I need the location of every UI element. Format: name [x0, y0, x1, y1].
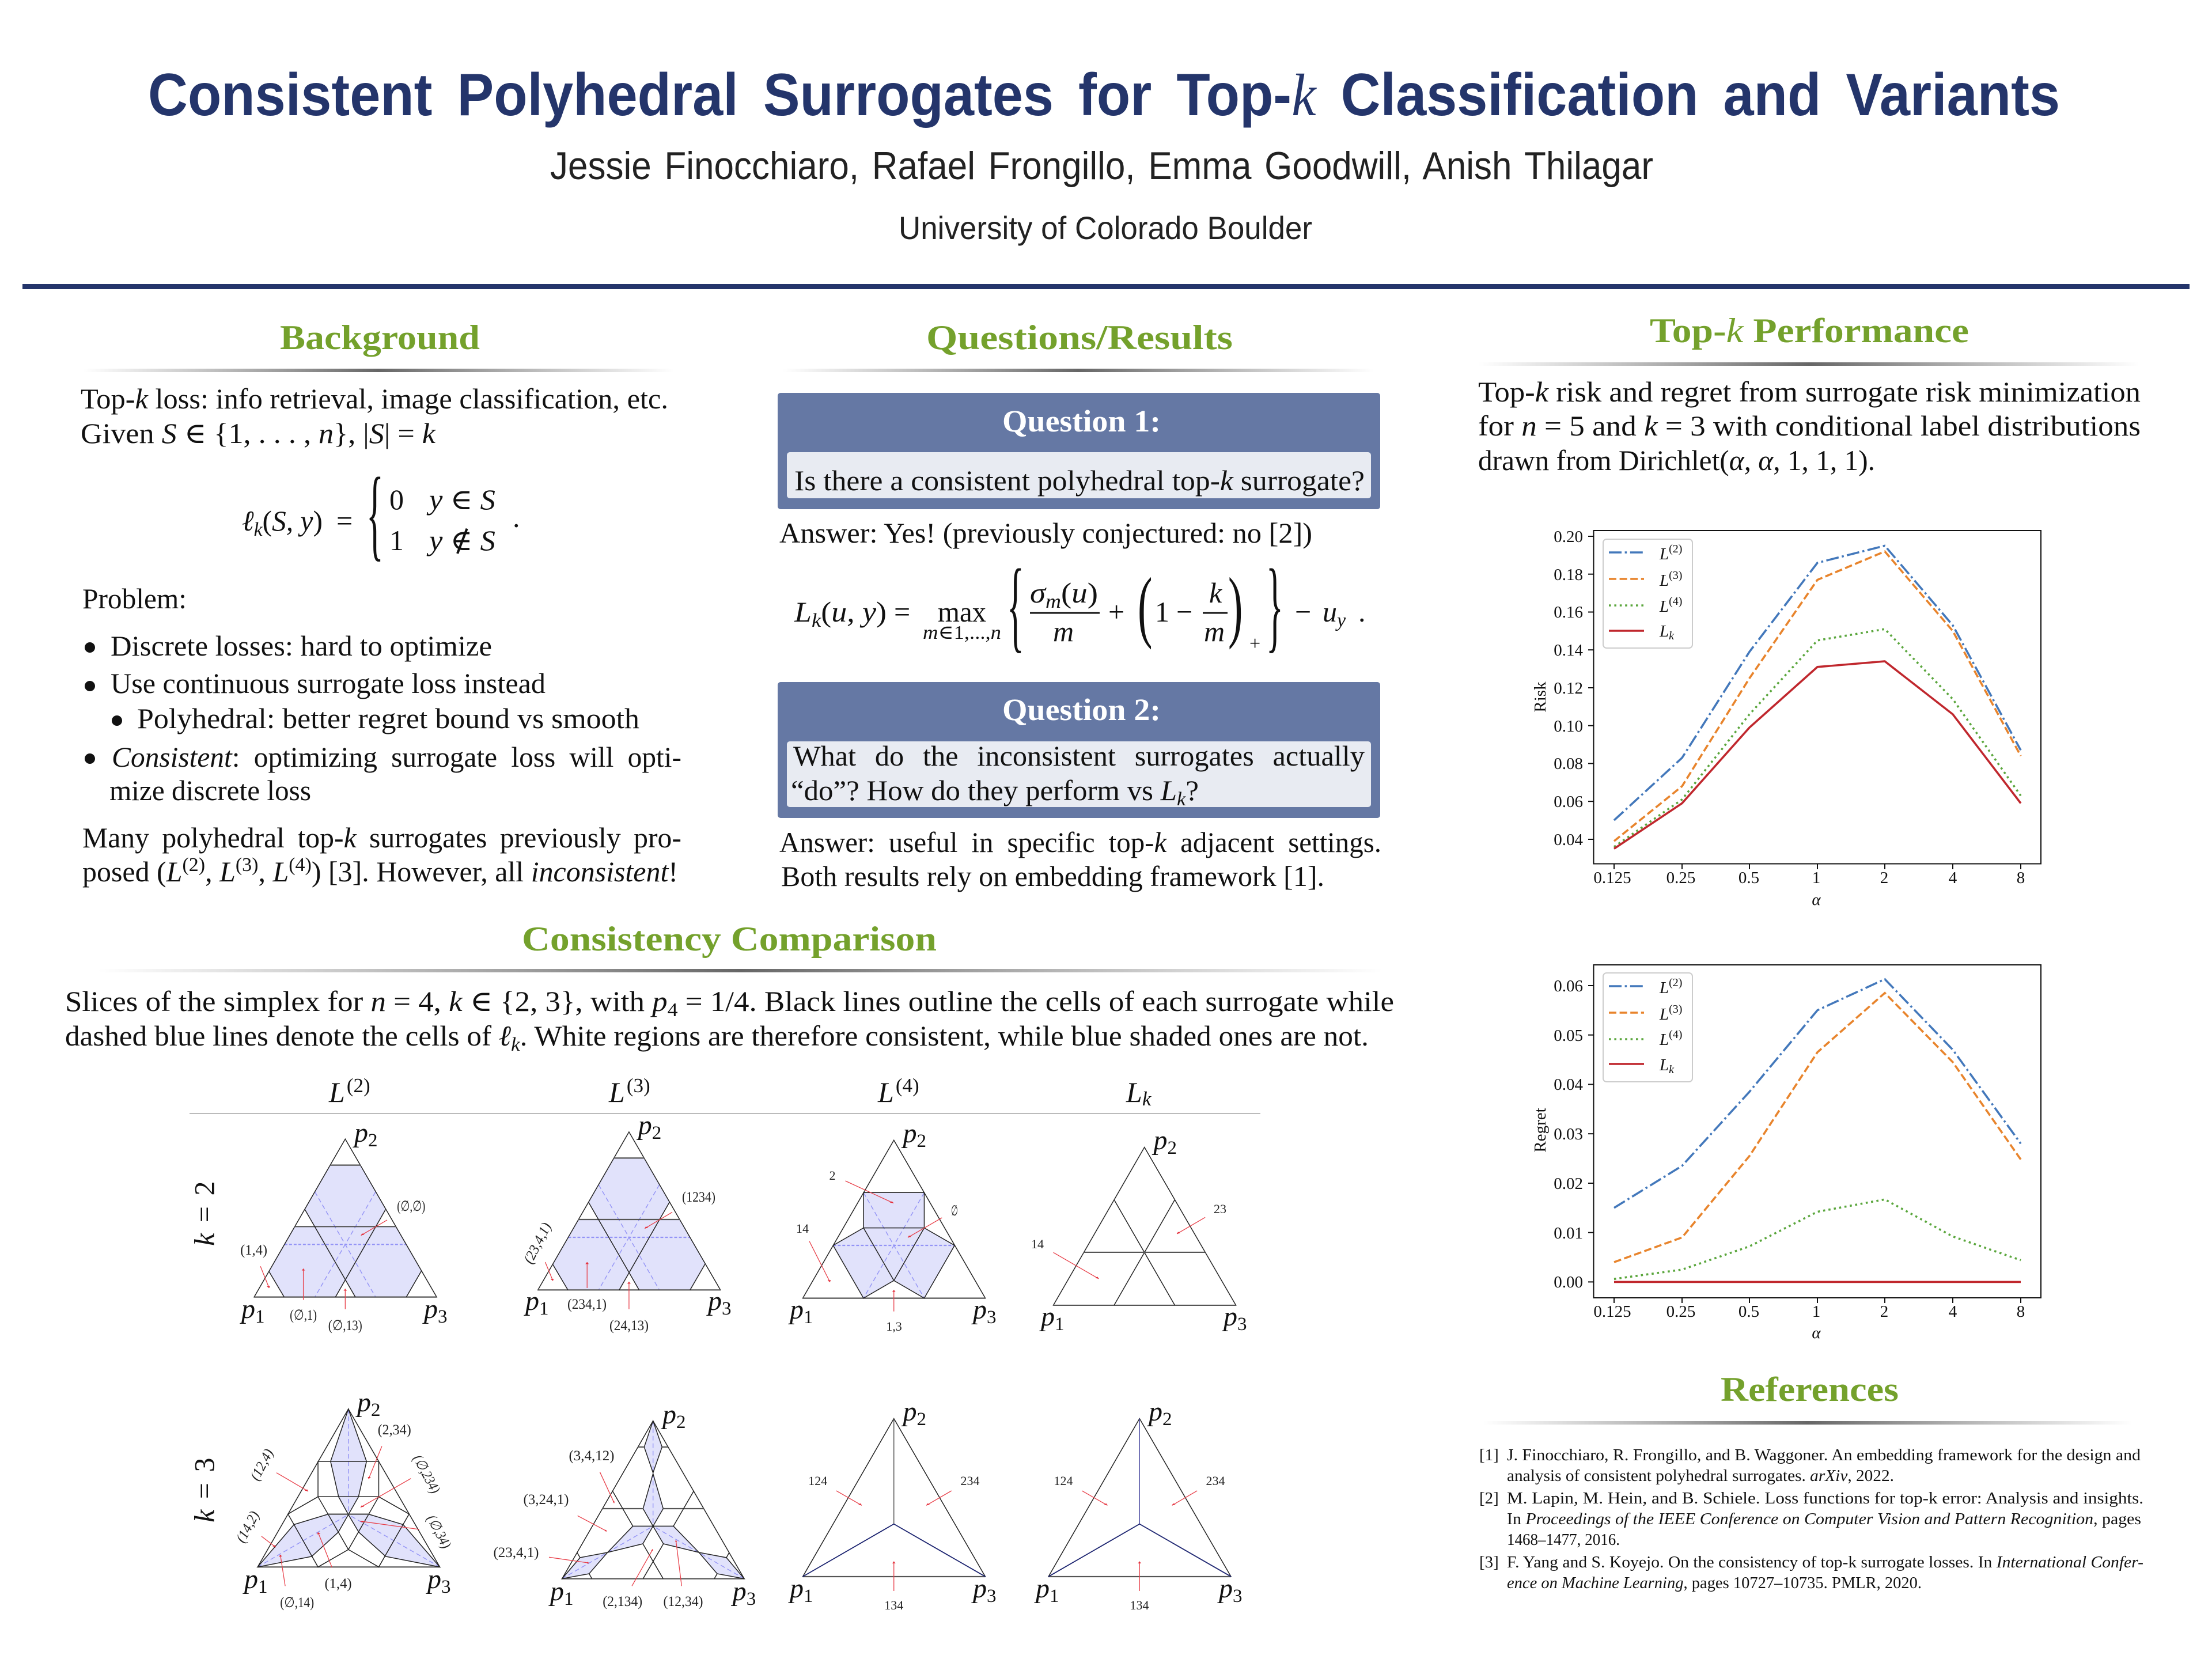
answer 1: Answer: Yes! (previously conjectured: no [2])	[779, 517, 1312, 549]
heading: top-k performance: Top-k Performance	[1650, 312, 1969, 350]
simplex: Lk k=2: 2	[1167, 1138, 1177, 1158]
line chart: regret: 0.04	[1554, 1075, 1583, 1094]
column headers	[328, 1074, 1152, 1110]
simplex: L2 k=2: 3	[438, 1306, 447, 1327]
simplex: L2 k=3: p	[427, 1564, 441, 1594]
line chart: regret: 8	[2017, 1302, 2025, 1321]
column headers: (3)	[627, 1074, 650, 1097]
simplex: L2 k=3: p	[244, 1564, 258, 1594]
line chart: risk: 0.20	[1554, 528, 1583, 546]
formula: surrogate Lk: .	[1358, 596, 1365, 628]
simplex: L3 k=3: (2,134)	[603, 1594, 642, 1609]
simplex: L3 k=2	[521, 1110, 732, 1334]
line chart: risk: α	[1812, 891, 1821, 909]
column headers: L	[609, 1076, 625, 1108]
text: description: k	[511, 1034, 521, 1055]
simplex: L4 k=3: p	[790, 1573, 804, 1604]
line chart: risk: 0.14	[1554, 641, 1583, 660]
formula: surrogate Lk: (	[1061, 577, 1071, 609]
formula: surrogate Lk: σ	[1030, 577, 1047, 609]
simplex: Lk k=3: 134	[1130, 1598, 1149, 1612]
question box 1: Is there a consistent polyhedral top- k surrogate?	[794, 464, 1365, 497]
reference list: M. Lapin, M. Hein, and B. Schiele. Loss functions for top-k error: Analysis and insights.	[1507, 1489, 2143, 1508]
formula: surrogate Lk: 1	[1155, 596, 1169, 628]
legend: L	[1660, 1056, 1669, 1074]
column headers: k	[1142, 1088, 1152, 1110]
legend: L	[1660, 979, 1669, 997]
simplex: L3 k=2: 2	[652, 1123, 661, 1143]
simplex: Lk k=2: p	[1153, 1125, 1167, 1156]
simplex: L3 k=2: (23,4,1)	[521, 1220, 555, 1266]
formula: discrete top-k loss: ℓ	[242, 505, 254, 537]
text: many surrogates: ) [3]. However, all	[312, 855, 531, 888]
answer 2: Both results rely on embedding framework [1].	[781, 860, 1324, 892]
bullet list	[85, 630, 681, 806]
text: many surrogates: ,	[258, 855, 272, 888]
simplex: L2 k=2: 1	[255, 1306, 265, 1327]
formula: surrogate Lk: m	[1046, 591, 1061, 612]
line chart: risk: 0.04	[1554, 831, 1583, 849]
formula: surrogate Lk: }	[1266, 548, 1283, 662]
legend: L	[1660, 1005, 1669, 1024]
line chart: risk: 8	[2017, 869, 2025, 887]
simplex: L3 k=2: 3	[722, 1298, 732, 1319]
line chart: risk: 0.18	[1554, 566, 1583, 584]
simplex: L4 k=3: 124	[808, 1474, 827, 1488]
simplex: L4 k=3: 2	[917, 1409, 926, 1430]
text: intro	[81, 382, 668, 449]
formula: surrogate Lk: u)	[1071, 577, 1097, 609]
legend: L	[1660, 545, 1669, 563]
simplex: L2 k=2: 2	[368, 1130, 378, 1151]
text: description: Slices of the simplex for n = 4, k ∈ {2, 3}, with p	[65, 985, 666, 1017]
text: performance description: Top-k risk and regret from surrogate risk minimization	[1478, 376, 2141, 408]
legend: L	[1660, 571, 1669, 590]
legend: (3)	[1669, 569, 1682, 582]
simplex: L4 k=2: 14	[796, 1221, 809, 1236]
heading: questions/results: Questions/Results	[926, 319, 1233, 357]
simplex: L4 k=3: 134	[884, 1598, 903, 1612]
text: problem: Problem:	[82, 582, 187, 615]
simplex: L4 k=3: p	[973, 1573, 987, 1604]
legend: (2)	[1669, 976, 1682, 989]
question box 2	[778, 682, 1380, 818]
line chart: risk: 0.5	[1738, 869, 1759, 887]
simplex: L4 k=3: p	[903, 1396, 917, 1427]
reference list: [2]	[1479, 1489, 1499, 1508]
formula: surrogate Lk: L	[794, 596, 812, 628]
formula: discrete top-k loss	[242, 456, 520, 570]
simplex: L2 k=3: (∅,34)	[423, 1513, 454, 1551]
panel: questions and results	[778, 319, 1381, 892]
reference list: [3]	[1479, 1553, 1499, 1571]
formula: discrete top-k loss: .	[513, 501, 520, 533]
bullet list: Discrete losses: hard to optimize	[111, 630, 492, 662]
formula: surrogate Lk: k	[1209, 577, 1222, 609]
simplex: L3 k=2: (234,1)	[567, 1297, 607, 1312]
simplex: Lk k=2: p	[1224, 1301, 1237, 1332]
simplex: Lk k=2: 3	[1237, 1314, 1247, 1335]
formula: discrete top-k loss: =	[336, 505, 353, 537]
formula: surrogate Lk: +	[1108, 596, 1124, 628]
reference list: In Proceedings of the IEEE Conference on Computer Vision and Pattern Recognition , pages	[1507, 1510, 2141, 1528]
formula: surrogate Lk: (	[1138, 562, 1152, 650]
simplex: L3 k=3: 3	[747, 1589, 756, 1609]
formula: discrete top-k loss: (	[263, 505, 272, 537]
simplex: L2 k=2: (∅,13)	[328, 1318, 362, 1334]
simplex: L2 k=3: (12,4)	[247, 1446, 276, 1483]
affiliation: University of Colorado Boulder	[899, 210, 1312, 246]
simplex: Lk k=2: 1	[1055, 1314, 1065, 1335]
simplex: L4 k=2: ∅	[951, 1203, 958, 1219]
heading: references: References	[1721, 1370, 1899, 1408]
legend: L	[1660, 597, 1669, 616]
formula: discrete top-k loss: y ∈ S	[426, 483, 495, 516]
simplex: L3 k=3: 2	[676, 1412, 685, 1433]
legend: k	[1669, 630, 1675, 642]
line chart: regret	[1531, 965, 2041, 1342]
line chart: regret: α	[1812, 1324, 1821, 1342]
line chart: regret: 0.05	[1554, 1027, 1583, 1045]
panel: references	[1479, 1370, 2143, 1592]
question box 1	[778, 393, 1380, 509]
simplex: L2 k=3: (∅,14)	[280, 1595, 314, 1611]
simplex: Lk k=3: p	[1219, 1573, 1233, 1604]
legend: (4)	[1669, 1028, 1682, 1041]
question box 1: Question 1:	[1002, 404, 1161, 438]
simplex: L4 k=2: p	[790, 1294, 804, 1325]
question box 2: What do the inconsistent surrogates actually	[793, 740, 1365, 772]
question box 2: k	[1177, 789, 1186, 810]
formula: surrogate Lk: (	[821, 596, 831, 628]
simplex: L2 k=3: (∅,234)	[410, 1452, 443, 1496]
simplex: L2 k=2: (∅,∅)	[397, 1199, 425, 1214]
column headers: (2)	[347, 1074, 370, 1097]
formula: surrogate Lk: m	[1053, 615, 1074, 647]
authors: Jessie Finocchiaro, Rafael Frongillo, Emma Goodwill, Anish Thilagar	[550, 144, 1653, 188]
simplex: L4 k=3: 1	[804, 1586, 813, 1607]
panel: consistency comparison	[65, 920, 1394, 1612]
legend: L	[1660, 622, 1669, 641]
legend: L	[1660, 1031, 1669, 1049]
simplex: L2 k=3	[233, 1387, 454, 1611]
simplex: L2 k=2: p	[354, 1118, 368, 1148]
line chart: regret: 0.25	[1666, 1302, 1695, 1321]
line chart: risk: 0.12	[1554, 679, 1583, 698]
simplex: L3 k=3	[493, 1399, 756, 1609]
simplex: L4 k=3: 3	[987, 1586, 997, 1607]
formula: surrogate Lk: y	[1335, 610, 1346, 631]
simplex: L4 k=2: p	[973, 1294, 987, 1325]
line chart: risk: 4	[1949, 869, 1957, 887]
formula: surrogate Lk: m	[1204, 615, 1225, 647]
simplex: L2 k=3: (1,4)	[325, 1576, 351, 1592]
legend: (2)	[1669, 543, 1682, 555]
simplex: L4 k=3: 234	[961, 1474, 979, 1488]
simplex: L3 k=3: (12,34)	[664, 1594, 703, 1609]
heading: consistency comparison: Consistency Comparison	[522, 920, 937, 958]
simplex: L3 k=3: (3,4,12)	[569, 1448, 614, 1464]
formula: surrogate Lk: u	[1323, 596, 1337, 628]
simplex: Lk k=3: 124	[1054, 1474, 1073, 1488]
formula: surrogate Lk: max	[938, 596, 986, 628]
simplex: L3 k=2: p	[525, 1286, 539, 1316]
title: Consistent Polyhedral Surrogates for Top-k Classification and Variants	[148, 62, 2060, 128]
column headers: L	[878, 1076, 894, 1108]
text: many surrogates: ,	[205, 855, 219, 888]
line chart: risk: 0.125	[1593, 869, 1631, 887]
legend	[1603, 539, 1692, 648]
line chart: risk: 0.06	[1554, 793, 1583, 811]
simplex: L3 k=2: p	[708, 1286, 722, 1316]
line chart: regret: 0.125	[1593, 1302, 1631, 1321]
bullet list: Consistent: optimizing surrogate loss will opti-	[112, 741, 681, 773]
text: description: = 1/4. Black lines outline the cells of each surrogate while	[678, 985, 1394, 1017]
simplex: L3 k=3: p	[662, 1399, 676, 1430]
line chart: regret: 0.00	[1554, 1273, 1583, 1291]
formula: surrogate Lk	[794, 548, 1365, 662]
column headers: L	[1126, 1076, 1142, 1108]
simplex: Lk k=3: 234	[1206, 1474, 1225, 1488]
text: many surrogates: (2)	[182, 854, 205, 876]
text: many surrogates: (3)	[236, 854, 258, 876]
simplex: L3 k=3: p	[733, 1576, 747, 1607]
simplex: L2 k=3: 3	[441, 1577, 450, 1597]
column headers: L	[329, 1076, 345, 1108]
panel: background	[81, 319, 681, 888]
panel: top-k performance	[1478, 312, 2141, 1342]
simplex: Lk k=2: p	[1041, 1301, 1055, 1332]
simplex: L4 k=2: 2	[917, 1131, 926, 1152]
line chart: risk: 0.16	[1554, 603, 1583, 622]
simplex: L2 k=2: p	[424, 1294, 438, 1324]
formula: surrogate Lk: =	[894, 596, 910, 628]
simplex: L2 k=3: (14,2)	[233, 1509, 263, 1546]
formula: discrete top-k loss: 1	[389, 524, 404, 556]
answer 2	[779, 826, 1381, 892]
bullet list: Use continuous surrogate loss instead	[111, 667, 546, 699]
line chart: risk: 0.25	[1666, 869, 1695, 887]
text: many surrogates: inconsistent!	[531, 855, 678, 888]
reference list: [1]	[1479, 1446, 1499, 1464]
line chart: regret: 0.03	[1554, 1125, 1583, 1143]
text: many surrogates: L	[272, 855, 289, 888]
reference list: F. Yang and S. Koyejo. On the consistency of top-k surrogate losses. In International Confer-	[1507, 1553, 2143, 1571]
simplex: Lk k=3: 1	[1050, 1586, 1059, 1607]
simplex: Lk k=3: p	[1036, 1573, 1050, 1604]
question box 2: ?	[1185, 774, 1199, 806]
simplex: Lk k=2: 14	[1031, 1237, 1044, 1251]
simplex: L2 k=3: 1	[258, 1577, 267, 1597]
text: many surrogates: L	[219, 855, 236, 888]
simplex: L4 k=3	[788, 1396, 997, 1612]
simplex: L4 k=2: 3	[987, 1307, 997, 1328]
line chart: risk	[1531, 528, 2041, 909]
simplex: L3 k=2: p	[638, 1110, 652, 1141]
simplex: L3 k=2: (1234)	[682, 1190, 715, 1205]
reference list	[1479, 1446, 2143, 1592]
simplex: L2 k=3: (2,34)	[378, 1422, 411, 1438]
text: description	[65, 985, 1394, 1055]
formula: discrete top-k loss: {	[366, 456, 384, 570]
formula: surrogate Lk: u, y)	[831, 596, 886, 628]
formula: surrogate Lk: −	[1295, 596, 1311, 628]
reference list: J. Finocchiaro, R. Frongillo, and B. Waggoner. An embedding framework for the design and	[1507, 1446, 2141, 1464]
bullet list: mize discrete loss	[109, 774, 311, 806]
text: performance description: for n = 5 and k = 3 with conditional label distributions	[1478, 410, 2141, 442]
simplex: L2 k=3: 2	[371, 1400, 380, 1421]
simplex: Lk k=3: 3	[1233, 1586, 1242, 1607]
simplex: L3 k=3: (23,4,1)	[493, 1545, 539, 1560]
line chart: regret: 0.01	[1554, 1224, 1583, 1243]
simplex: L4 k=2: 1	[804, 1307, 813, 1328]
line chart: regret: 4	[1949, 1302, 1957, 1321]
formula: surrogate Lk: k	[812, 610, 821, 631]
simplex: L2 k=2: (1,4)	[240, 1243, 267, 1258]
answer 2: Answer: useful in specific top-k adjacent settings.	[779, 826, 1381, 858]
row label: k=2: k = 2	[188, 1181, 220, 1246]
simplex: L2 k=2	[240, 1118, 447, 1334]
simplex: L2 k=2: p	[241, 1294, 255, 1324]
reference list: 1468–1477, 2016.	[1507, 1531, 1620, 1549]
text: many surrogates: posed (L	[82, 855, 182, 888]
formula: surrogate Lk: +	[1249, 633, 1260, 654]
simplex: L3 k=3: p	[550, 1576, 564, 1607]
legend: (4)	[1669, 595, 1682, 608]
line chart: risk: Risk	[1531, 681, 1550, 713]
row label: k=3: k = 3	[188, 1457, 220, 1522]
simplex: L3 k=3: (3,24,1)	[523, 1492, 569, 1508]
text: description: dashed blue lines denote the cells of ℓ	[65, 1020, 511, 1052]
column headers: (4)	[896, 1074, 919, 1097]
simplex: Lk k=2: 23	[1214, 1202, 1226, 1216]
simplex: L3 k=3: 1	[564, 1589, 574, 1609]
question box 2: Question 2:	[1002, 692, 1161, 727]
text: intro: Given S ∈ {1, . . . , n}, |S| = k	[81, 417, 436, 449]
text: many surrogates	[82, 821, 681, 888]
line chart: risk: 2	[1880, 869, 1888, 887]
simplex: L4 k=2: p	[903, 1118, 917, 1149]
formula: discrete top-k loss: k	[254, 519, 263, 540]
legend	[1603, 973, 1692, 1082]
formula: discrete top-k loss: S, y)	[272, 505, 323, 537]
formula: surrogate Lk: )	[1228, 562, 1243, 650]
formula: surrogate Lk: −	[1176, 596, 1192, 628]
line chart: risk: 1	[1812, 869, 1820, 887]
reference list: analysis of consistent polyhedral surrogates. arXiv, 2022.	[1507, 1467, 1894, 1485]
simplex: Lk k=2	[1031, 1125, 1247, 1335]
text: description: 4	[668, 999, 678, 1021]
text: performance description	[1478, 376, 2141, 476]
simplex: L4 k=2: 2	[830, 1168, 835, 1183]
question box 2: “do”? How do they perform vs L	[791, 774, 1177, 806]
simplex: L2 k=2: (∅,1)	[290, 1308, 317, 1323]
formula: surrogate Lk: {	[1007, 548, 1024, 662]
simplex: Lk k=3: 2	[1162, 1409, 1172, 1430]
simplex: Lk k=3: p	[1149, 1396, 1162, 1427]
line chart: regret: 0.5	[1738, 1302, 1759, 1321]
simplex: L3 k=2: (24,13)	[609, 1318, 649, 1334]
simplex: L4 k=2: 1,3	[886, 1319, 902, 1334]
formula: discrete top-k loss: y ∉ S	[426, 524, 495, 556]
simplex: L3 k=2: 1	[539, 1298, 548, 1319]
legend: (3)	[1669, 1003, 1682, 1016]
line chart: regret: 0.06	[1554, 977, 1583, 995]
text: many surrogates: Many polyhedral top-k surrogates previously pro-	[82, 821, 681, 854]
line chart: risk: 0.10	[1554, 717, 1583, 736]
legend: k	[1669, 1063, 1675, 1076]
simplex: L4 k=2	[788, 1118, 997, 1334]
heading: background: Background	[280, 319, 480, 357]
line chart: risk: 0.08	[1554, 755, 1583, 773]
formula: surrogate Lk: m∈1,...,n	[923, 622, 1001, 643]
formula: discrete top-k loss: 0	[389, 483, 404, 516]
text: performance description: drawn from Dirichlet(α, α, 1, 1, 1).	[1478, 444, 1875, 476]
simplex: Lk k=3	[1034, 1396, 1242, 1612]
simplex: L2 k=3: p	[357, 1387, 371, 1418]
line chart: regret: 1	[1812, 1302, 1820, 1321]
bullet list: Polyhedral: better regret bound vs smooth	[137, 702, 639, 734]
reference list: ence on Machine Learning, pages 10727–10735. PMLR, 2020.	[1507, 1574, 1922, 1592]
text: many surrogates: (4)	[289, 854, 312, 876]
line chart: regret: 2	[1880, 1302, 1888, 1321]
text: description: . White regions are therefore consistent, while blue shaded ones are not.	[520, 1020, 1369, 1052]
line chart: regret: Regret	[1531, 1108, 1550, 1153]
text: intro: Top-k loss: info retrieval, image classification, etc.	[81, 382, 668, 415]
line chart: regret: 0.02	[1554, 1175, 1583, 1193]
